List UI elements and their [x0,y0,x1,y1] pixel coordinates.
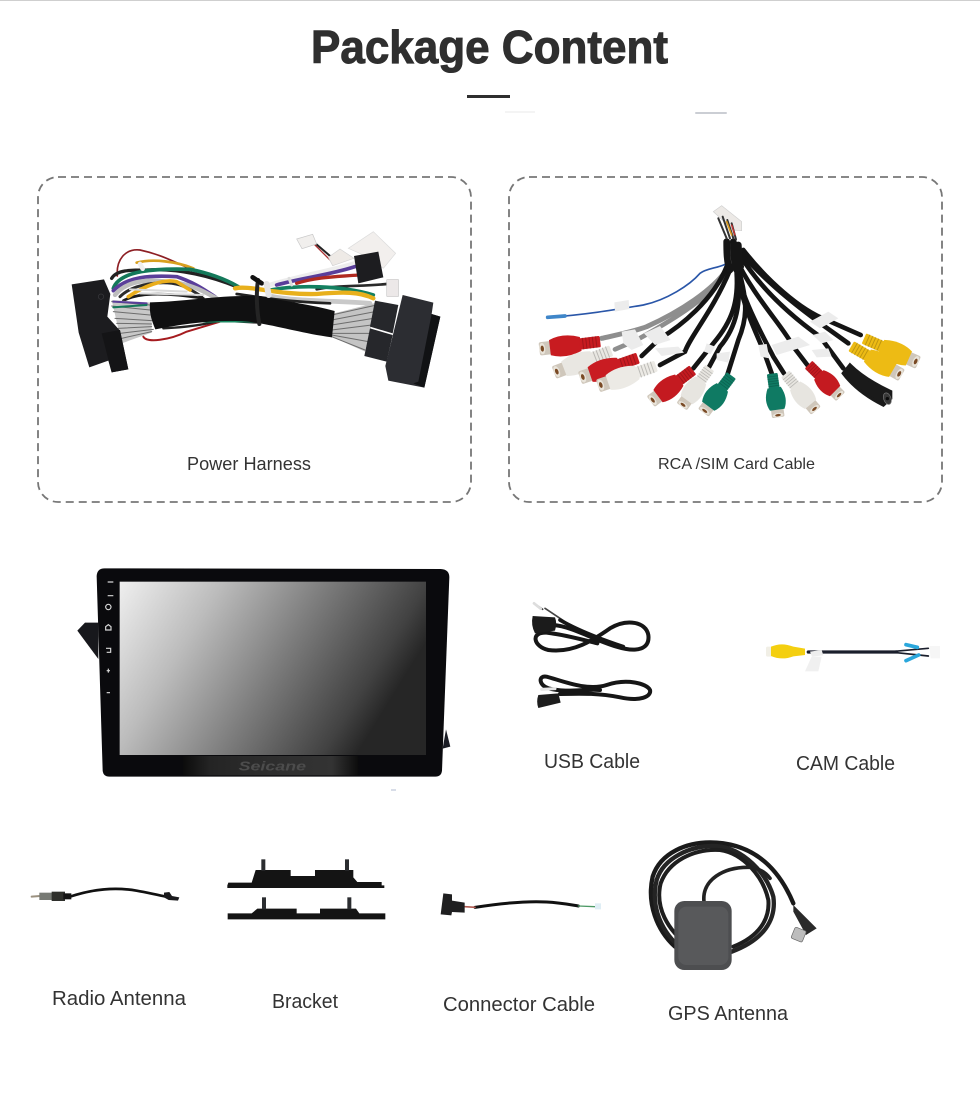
panel: power harness [38,177,471,502]
image: power harness [72,232,440,388]
label: rca / sim card cable: RCA /SIM Card Cable [658,456,815,473]
label: gps antenna: GPS Antenna [668,1003,789,1025]
image: rca cable [538,206,923,419]
bezel [97,568,449,777]
image: usb cables [532,603,650,708]
title: Package Content [311,21,668,73]
brand logo: Seicane [239,759,307,774]
right tab [443,729,450,749]
side buttons [106,582,113,693]
image: car stereo head unit [77,568,450,777]
label: connector cable: Connector Cable [443,994,595,1016]
screen [120,582,426,755]
title underline [467,95,510,98]
image: brackets [227,859,385,919]
image: gps antenna [651,842,817,970]
label: power harness: Power Harness [187,454,311,474]
image: cam cable [766,644,940,671]
panel: rca / sim card cable [509,177,942,502]
logo strip [183,756,358,775]
image: radio antenna [32,889,179,901]
left bracket wedge [77,623,98,659]
image: connector cable [441,893,601,915]
label: usb cable: USB Cable [544,751,640,773]
label: cam cable: CAM Cable [796,753,895,775]
label: bracket: Bracket [272,991,338,1013]
label: radio antenna: Radio Antenna [52,988,187,1010]
